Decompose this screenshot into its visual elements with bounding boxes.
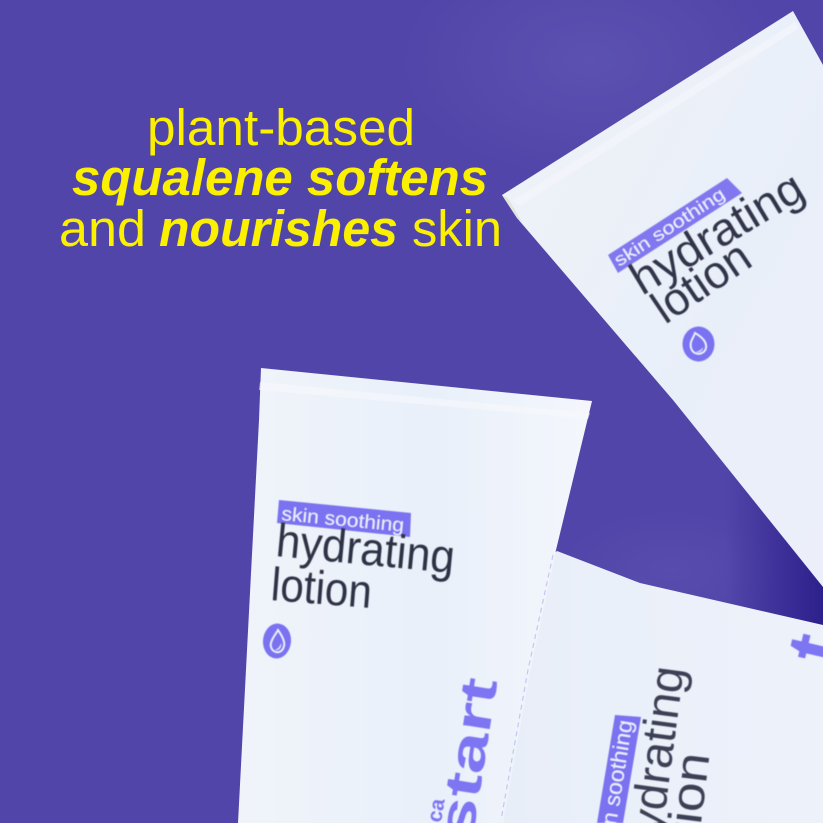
headline	[59, 99, 502, 257]
tube product name: hydrating lotion	[633, 668, 710, 823]
headline line 3: and	[59, 200, 146, 257]
tube brand mark: start	[423, 674, 508, 823]
headline line 2: squalene softens	[72, 149, 488, 206]
tube brand mark: start: ca	[423, 797, 450, 823]
tube: top right hydrating lotion	[502, 11, 823, 587]
headline line 1: plant-based	[147, 99, 415, 156]
headline line 3	[59, 200, 502, 257]
tube label: skin soothing tag	[608, 178, 742, 273]
tube product name: hydrating lotion	[269, 513, 457, 618]
tube product name: hydrating lotion: hydrating	[274, 513, 457, 583]
tube product name: hydrating lotion: hydrating	[620, 161, 813, 305]
tube: bottom right hydrating lotion	[490, 545, 823, 823]
icon: water drop badge	[262, 622, 292, 660]
icon: water drop badge	[682, 326, 714, 362]
crimped seam	[512, 22, 799, 206]
crimped seam	[259, 382, 590, 419]
tube label: skin soothing tag: skin soothing	[610, 184, 729, 270]
tube label: skin soothing tag: skin soothing	[281, 503, 405, 537]
tube product name: hydrating lotion: lotion	[269, 557, 374, 618]
tube: bottom left hydrating lotion	[238, 368, 592, 823]
tube product name: hydrating lotion: lotion	[642, 230, 760, 333]
headline line 3: nourishes	[159, 200, 398, 257]
tube edge stitching	[501, 555, 553, 820]
headline line 3: skin	[412, 200, 502, 257]
